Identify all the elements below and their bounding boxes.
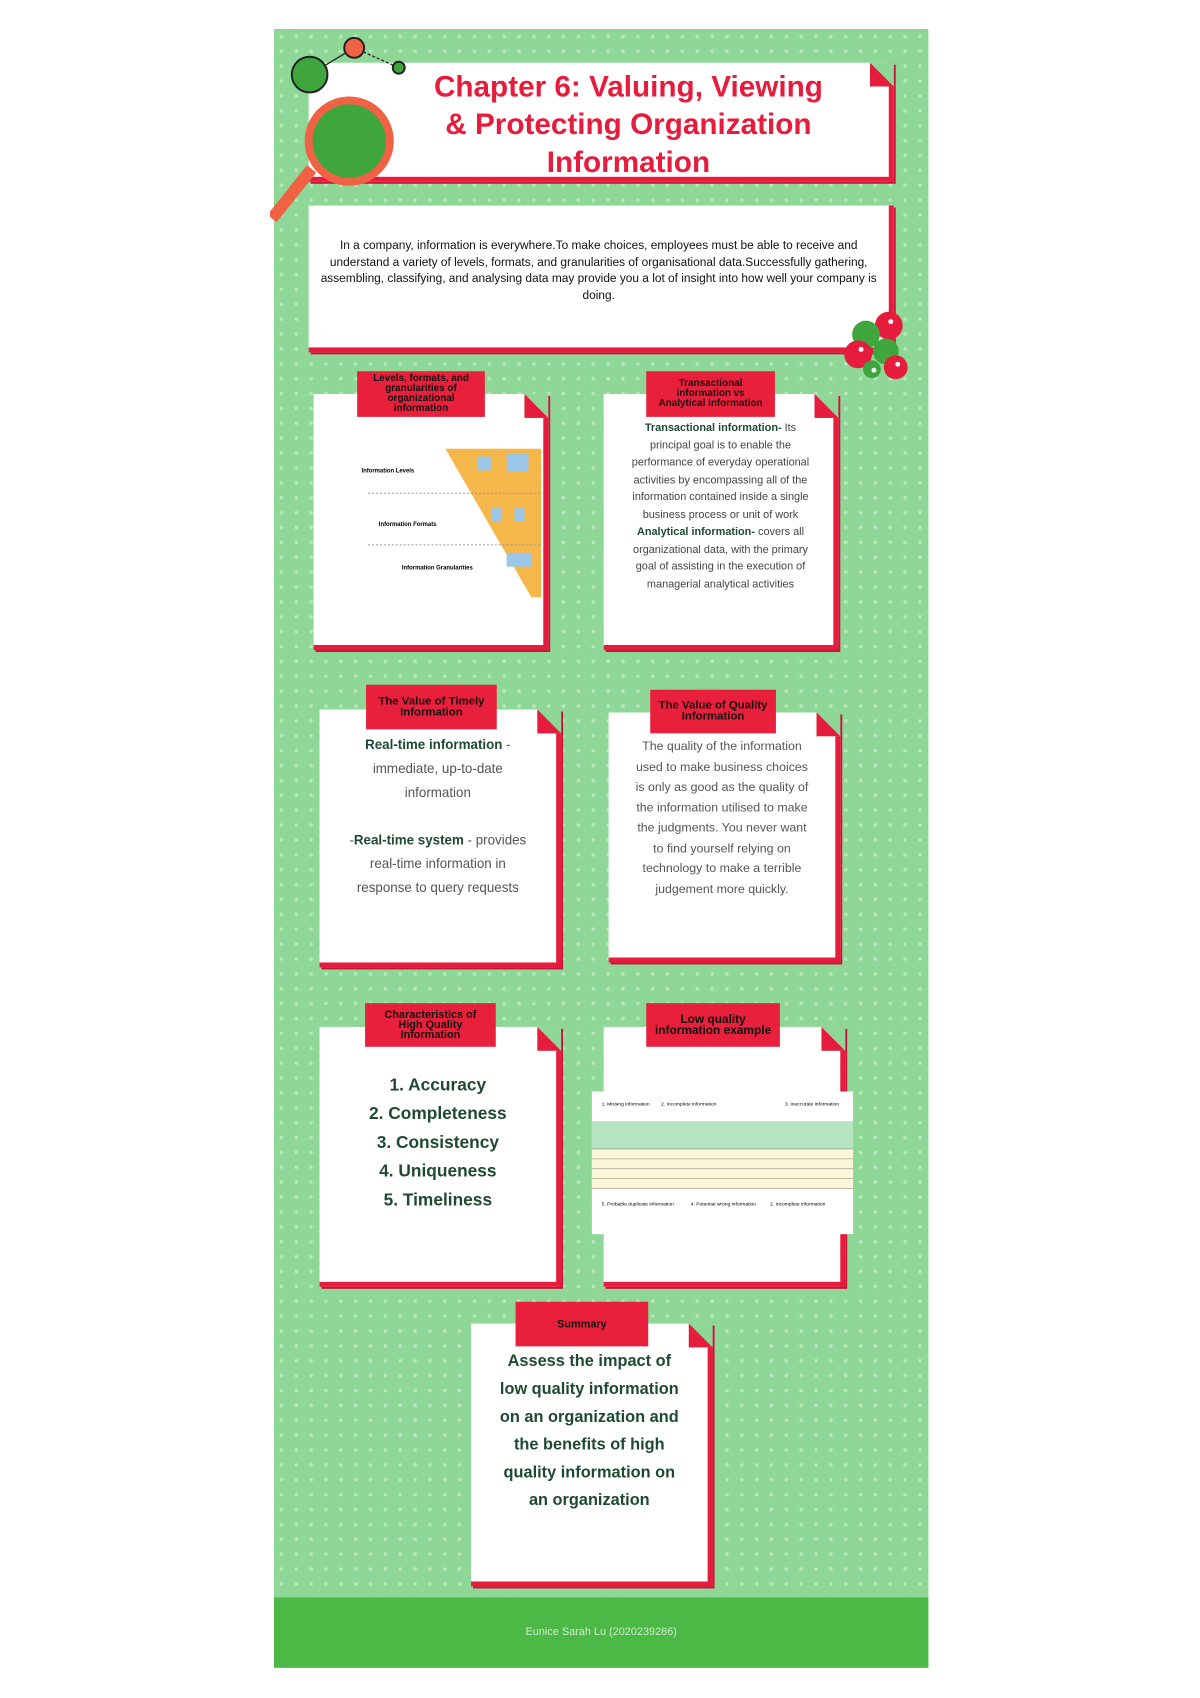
table image: 2. Incomplete information	[661, 1101, 717, 1107]
panel: levels formats	[314, 394, 548, 650]
panel: summary	[471, 1324, 713, 1586]
tag: summary: Summary	[557, 1318, 607, 1330]
tag: timely: The Value of Timely Information	[378, 695, 484, 718]
title: Chapter 6: Valuing, Viewing	[434, 71, 823, 103]
panel: transactional vs analytical	[604, 394, 838, 650]
tag: characteristics	[365, 1003, 496, 1047]
tag: characteristics: Characteristics of High Quality Information	[384, 1009, 476, 1041]
table image: 5. Probable duplicate information	[602, 1202, 674, 1208]
panel: timely	[320, 710, 561, 967]
list	[369, 1075, 507, 1209]
tag: transactional: Transactional information vs Analytical information	[659, 378, 763, 409]
text: Transactional information- Its principal goal is to enable the performance of everyday operational activities by encompassing all of the information contained inside a single business process or unit of work	[632, 422, 809, 521]
tag: quality	[650, 690, 776, 733]
tag: low quality	[646, 1003, 780, 1047]
footer	[274, 1597, 928, 1668]
table image: 2. Incomplete information	[770, 1202, 826, 1208]
icon: magnifier and molecule	[270, 36, 406, 222]
tag: summary	[516, 1302, 648, 1346]
pyramid diagram: Information Levels	[361, 468, 415, 474]
icon: berries	[844, 312, 908, 380]
tag: quality: The Value of Quality Information	[659, 700, 767, 722]
tag: levels	[357, 371, 485, 417]
panel: summary: Assess the impact of low quality information on an organization and the benefits of high quality information on an organization	[500, 1352, 679, 1509]
text: Analytical information- covers all organizational data, with the primary goal of assisting in the execution of managerial analytical activities	[633, 526, 808, 590]
list: 1. Accuracy	[390, 1075, 486, 1094]
panel: low quality example	[604, 1027, 845, 1287]
tag: low quality: Low quality information example	[655, 1012, 771, 1037]
list: 5. Timeliness	[384, 1190, 492, 1209]
panel: characteristics	[320, 1027, 561, 1287]
pyramid diagram	[361, 448, 542, 598]
intro text: In a company, information is everywhere.To make choices, employees must be able to receive and understand a variety of levels, formats, and granularities of organisational data.Successfully gathering, assembling, classifying, and analysing data may provide you a lot of insight into how well your company is doing.	[321, 238, 877, 301]
title box	[309, 63, 894, 182]
table image	[592, 1092, 854, 1234]
table image: 3. Inaccurate information	[785, 1101, 839, 1107]
panel: timely: Real-time information - immediate, up-to-date information	[365, 737, 511, 800]
panel: quality	[609, 712, 840, 962]
title: Information	[547, 146, 710, 179]
footer: Eunice Sarah Lu (2020239286)	[526, 1626, 677, 1638]
text	[632, 422, 809, 590]
title: & Protecting Organization	[445, 108, 812, 141]
pyramid diagram: Information Granularities	[402, 566, 473, 572]
pyramid diagram: Information Formats	[379, 522, 437, 528]
background panel	[274, 29, 928, 1668]
table image: 1. Missing information	[602, 1101, 650, 1107]
tag: timely	[366, 685, 497, 729]
panel: timely: -Real-time system - provides real-time information in response to query requests	[349, 833, 526, 895]
list: 2. Completeness	[369, 1103, 507, 1123]
tag: transactional	[646, 371, 775, 417]
title	[434, 71, 823, 179]
panel: quality: The quality of the information used to make business choices is only as good as the quality of the information utilised to make the judgments. You never want to find yourself relying on technology to make a terrible judgement more quickly.	[636, 739, 808, 896]
intro box	[309, 206, 894, 352]
list: 3. Consistency	[377, 1132, 499, 1152]
tag: levels: Levels, formats, and granularities of organizational information	[373, 373, 469, 414]
table image: 4. Potential wrong information	[691, 1202, 756, 1208]
list: 4. Uniqueness	[379, 1161, 497, 1181]
